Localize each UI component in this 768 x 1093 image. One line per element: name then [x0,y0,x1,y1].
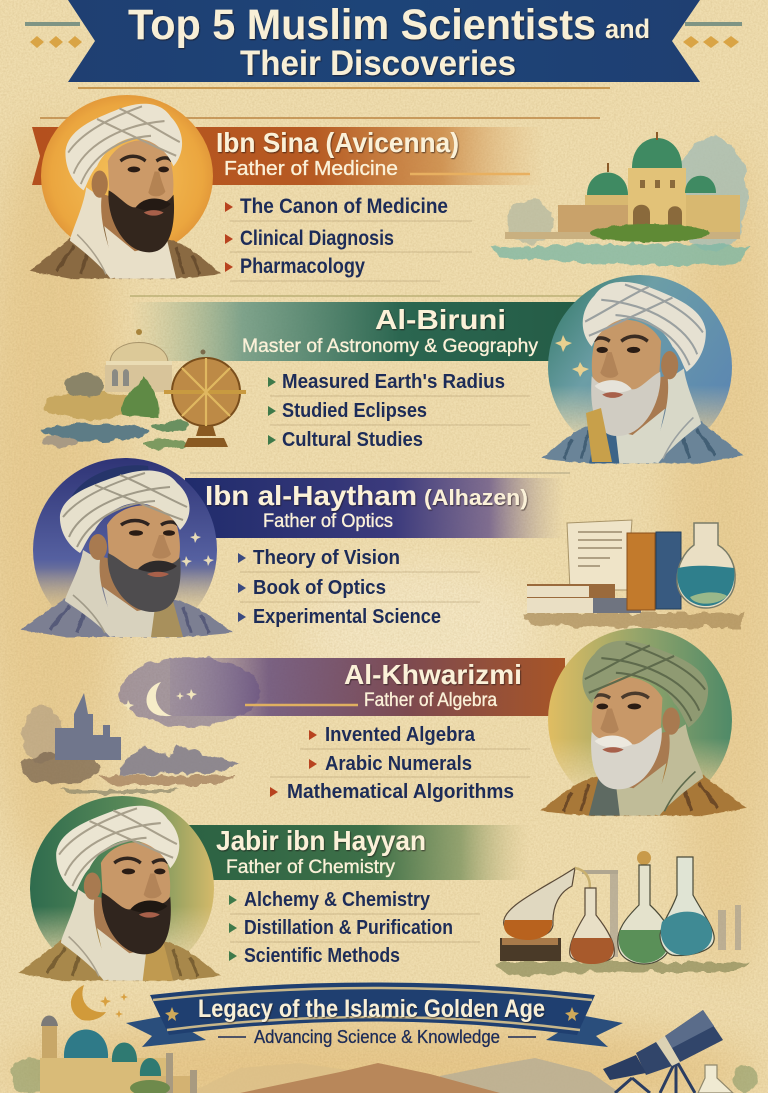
portrait: Jabir ibn Hayyan [18,796,221,981]
discoveries list [270,723,530,803]
scene: chemistry flasks [495,851,750,976]
discoveries list: Clinical Diagnosis [240,227,394,250]
scientist title: Father of Algebra [364,690,497,711]
banner: Ibn al-Haytham [185,473,570,538]
discoveries list: Theory of Vision [253,546,400,569]
heading: Top 5 Muslim Scientists [128,1,596,49]
discoveries list: Cultural Studies [282,428,423,451]
scene: domed observatory and armillary globe [40,329,246,449]
discoveries list: Pharmacology [240,255,365,278]
portrait: Ibn al-Haytham [20,458,233,642]
panel: legacy banner [126,982,623,1047]
panel: Jabir ibn Hayyan [18,796,750,981]
portrait: Al-Biruni [541,275,744,463]
discoveries list: Book of Optics [253,576,386,599]
discoveries list: Studied Eclipses [282,399,427,422]
discoveries list [225,195,472,281]
scene: domed building by water [490,132,750,265]
discoveries list: Alchemy & Chemistry [244,888,431,911]
portrait: Al-Khwarizmi [540,628,747,816]
scene: books and flask [522,520,745,628]
discoveries list: The Canon of Medicine [240,195,448,218]
scientist name [205,480,528,511]
scientist name: Ibn al-Haytham [205,480,417,511]
scene: night city with crescent [20,682,240,794]
scientist title: Father of Medicine [224,158,398,180]
icon: telescope and flask [603,1010,757,1093]
scientist title: Father of Chemistry [226,857,396,878]
scene: mountains [190,1058,620,1093]
panel: Ibn Sina [29,95,750,281]
banner subheading: Advancing Science & Knowledge [254,1027,500,1047]
scientist name: Al-Biruni [375,304,506,335]
icon: mosque and crescent [10,985,197,1093]
scientist name: Al-Khwarizmi [344,659,522,690]
scientist name: (Alhazen) [424,485,528,510]
heading: and [605,14,650,44]
scientist title: Father of Optics [263,511,393,532]
portrait: Ibn Sina [29,95,221,279]
discoveries list [229,888,480,967]
banner heading: Legacy of the Islamic Golden Age [198,995,545,1023]
title banner [25,0,742,88]
ribbon [126,982,623,1047]
panel: Al-Khwarizmi [20,628,747,816]
discoveries list: Mathematical Algorithms [287,780,514,803]
banner: Al-Biruni [130,296,590,361]
discoveries list: Distillation & Purification [244,916,453,939]
discoveries list: Arabic Numerals [325,752,472,775]
scientist name: Ibn Sina (Avicenna) [216,127,459,158]
heading [128,1,650,83]
panel: Ibn al-Haytham [20,458,745,642]
discoveries list: Scientific Methods [244,944,400,967]
banner: Al-Khwarizmi [120,657,565,727]
discoveries list [238,546,480,628]
banner: Ibn Sina [32,118,600,185]
heading: Their Discoveries [240,44,516,83]
panel: Al-Biruni [40,275,744,463]
discoveries list: Measured Earth's Radius [282,370,505,393]
scientist title: Master of Astronomy & Geography [242,336,539,357]
discoveries list [268,370,530,451]
discoveries list: Experimental Science [253,605,441,628]
banner: Jabir ibn Hayyan [185,825,530,880]
scientist name: Jabir ibn Hayyan [216,825,426,856]
discoveries list: Invented Algebra [325,723,476,746]
